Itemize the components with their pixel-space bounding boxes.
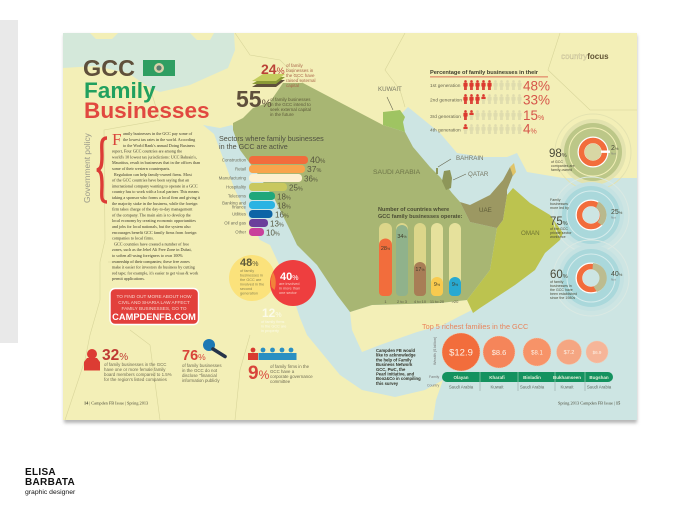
pictogram chart: generations: 4th generation (430, 128, 461, 134)
bar chart: sectors: 25% (289, 184, 303, 192)
stat: 24% raised capital: raised external (286, 78, 316, 83)
donut: 98% family-owned: family-owned (551, 168, 572, 172)
article text: Regulation can help family-owned firms. Most (114, 172, 193, 177)
article text: of the company. The main aim is to develop the (112, 212, 191, 217)
article text: to the World Bank's annual Doing Business (123, 143, 195, 148)
chart: richest families: Saudi Arabia (587, 384, 612, 390)
stat: 48% circle (229, 255, 275, 301)
donut: 60% established: the GCC have (550, 288, 573, 292)
credit text: Booz&Co in compiling (376, 376, 421, 381)
article text: encourages benefit GCC family firms from foreign (112, 230, 196, 235)
icon: red brace (97, 138, 107, 202)
stat: 12%: in property (261, 329, 279, 333)
map labels: SAUDI ARABIA (373, 169, 421, 176)
chart: richest families: Binladin (523, 375, 541, 380)
pictogram chart: generations: 1st generation (430, 83, 461, 89)
chart: richest families (427, 333, 613, 391)
pictogram chart: generations: 33% (523, 92, 550, 108)
icon: GCC flag (143, 60, 175, 76)
article text: local economy by creating economic opportunities (112, 218, 196, 223)
stat: 9%: corporate governance (270, 374, 313, 379)
stat: 76%: in the GCC do not (182, 368, 218, 373)
bar chart: sectors: 13% (270, 220, 284, 228)
chart: richest families: Kharafi (489, 375, 505, 380)
credit text (376, 348, 421, 386)
map background (63, 33, 637, 420)
donut: 60% established: Not (611, 278, 616, 282)
bar chart: sectors: Telecoms (228, 194, 246, 198)
article text: GCC countries have created a number of free (114, 241, 189, 246)
stat: 9%: GCC have a (270, 369, 295, 374)
title (83, 55, 210, 123)
stat: 40% circle: one sector (279, 291, 297, 295)
chart: richest families: $8.6 (492, 348, 506, 357)
pictogram chart: generations: 15% (523, 108, 544, 123)
stat: 48% circle: businesses in (240, 274, 263, 278)
stat: 24% raised capital: the GCC have (286, 73, 315, 78)
stat: 12%: 12% (262, 306, 282, 320)
stat: 9% (248, 363, 313, 384)
donut: 60% established: 40% (611, 271, 623, 278)
article text: report, Four GCC countries are among the (112, 149, 182, 155)
bar chart: sectors: 10% (266, 228, 280, 238)
chart: richest families: Kuwait (561, 384, 574, 390)
stat: 76%: information publicly (182, 378, 220, 383)
map labels: BAHRAIN (456, 155, 484, 162)
designer credit: ELISA (25, 467, 56, 478)
panel shadow (64, 35, 637, 423)
stat: 40% circle: are involved (279, 282, 299, 286)
donut: 75% private: businesses (550, 202, 568, 206)
icon: committee people (248, 348, 296, 360)
donut: 98% family-owned (549, 114, 631, 190)
bar chart: countries: 1 (384, 299, 387, 304)
bar chart: countries: >20 (452, 299, 459, 304)
map labels: UAE (479, 207, 492, 214)
stat: 24% raised capital (261, 61, 316, 88)
designer credit (25, 467, 76, 496)
article text: some of their western counterparts. (112, 166, 170, 171)
donut: 98% family-owned: Not (611, 152, 616, 156)
chart: richest families: Saudi Arabia (449, 384, 474, 390)
bar chart: countries: 28% (381, 246, 390, 252)
chart: richest families: $12.9 (449, 348, 473, 358)
map labels: OMAN (521, 230, 540, 237)
stat: 76%: disclose "financial (182, 373, 217, 378)
stat: 48% circle: generation (240, 292, 258, 296)
callout: campdenfb: FAMILY BUSINESSES, GO TO (121, 306, 187, 311)
title: GCC (83, 55, 135, 81)
callout: campdenfb: TO FIND OUT MORE ABOUT HOW (116, 294, 192, 299)
article text: to soften all-using foreigners to own 100% (112, 253, 183, 258)
stat: 48% circle: of family (240, 269, 254, 273)
credit text: like to acknowledge (376, 353, 416, 358)
article text: ownership of their companies; these free zones (112, 259, 190, 264)
donut: 75% private: more led by (550, 206, 569, 210)
heading: country focus: countryfocus (561, 52, 609, 61)
article text: the majority stake in the business, while the foreign (112, 201, 197, 207)
article text: amily businesses in the GCC pay some of (123, 131, 193, 136)
pictogram chart: generations: 3rd generation (430, 114, 461, 120)
bar chart: sectors: 40% (310, 155, 326, 165)
donut: 75% private: of the GCC (550, 227, 568, 231)
heading: sectors: in the GCC are active (219, 142, 288, 151)
credit text: GCC, PwC, the (376, 367, 406, 372)
stat: 76%: of family businesses (182, 363, 222, 368)
designer credit: graphic designer (25, 489, 76, 496)
chart: richest families: Kuwait (491, 384, 504, 390)
bar chart: sectors: finance (232, 204, 247, 210)
side strip (0, 20, 18, 343)
bar chart: sectors: 18% (277, 192, 291, 202)
stat: 24% raised capital: 24% (261, 61, 285, 77)
stat: 12%: in the GCC are (261, 324, 286, 328)
donut: 98% family-owned: 2% (611, 145, 619, 152)
pictogram chart: generations: 2nd generation (430, 98, 462, 104)
heading: countries (378, 207, 463, 220)
chart: richest families: $6.9 (593, 350, 602, 355)
bar chart: countries: 4 to 10 (414, 299, 427, 304)
stat: 32% female: of family businesses in the GCC (104, 362, 166, 367)
stat: 24% raised capital: businesses in (286, 68, 314, 73)
stat: 55% external capital: in the GCC intend to (270, 102, 311, 107)
article text (112, 131, 201, 281)
credit text: this survey (376, 381, 399, 386)
icon: stacked layers (252, 74, 285, 87)
stat: 48% circle: the GCC are (240, 278, 261, 282)
article text: red tape; for example, it's easier to get visas & work (112, 270, 199, 276)
stat: 9%: committee (270, 379, 291, 384)
donut: 75% private: Not (611, 216, 616, 220)
bar chart: sectors: 37% (307, 164, 321, 174)
stat: 32% female: have one or more female family (104, 367, 166, 372)
bar chart: sectors: Manufacturing (219, 176, 247, 180)
heading: richest families: Top 5 richest families in the GCC (422, 322, 528, 331)
map labels: QATAR (468, 171, 489, 178)
bar chart: sectors: 16% (275, 210, 289, 220)
bar chart: sectors: Other (235, 230, 247, 234)
footer right: Spring 2013 Campden FB Issue | 15 (558, 400, 620, 406)
stat: 55% external capital (236, 86, 311, 117)
donut: 75% private: Family (550, 198, 561, 202)
donut: 75% private: 25% (611, 209, 623, 216)
stat: 48% circle: involved in the (240, 282, 264, 286)
designer credit: BARBATA (25, 477, 75, 488)
article text: firm takes charge of the day-to-day management (112, 207, 193, 212)
article text: international company wanting to operate in a GCC (112, 183, 198, 188)
donut: 60% established: been established (550, 292, 577, 296)
article text: and jobs for local nationals, but the system also (112, 224, 191, 230)
callout: campdenfb: CIVIL AND SHARIA LAW AFFECT (118, 300, 190, 305)
donut: 75% private: 75% (550, 216, 568, 228)
credit text: the help of Family (376, 357, 412, 362)
heading: sectors (219, 134, 324, 151)
chart: richest families: Olayan (453, 375, 469, 380)
article text: of the GCC countries have been saying that an (112, 178, 189, 183)
bar chart: countries: 17% (415, 267, 425, 273)
icon: microphone (203, 339, 225, 356)
donut: 75% private (550, 177, 629, 253)
article text: make it easier for investors do business by cutting (112, 265, 195, 270)
chart: richest families: Country (427, 384, 440, 388)
pictogram chart: generations: 48% (523, 78, 550, 94)
bar chart: countries: 9% (434, 282, 440, 288)
map labels (373, 86, 540, 237)
bar chart: sectors: Banking and (222, 200, 247, 206)
stat: 55% external capital: in the future (270, 112, 294, 117)
donut: 60% established: 60% (550, 269, 568, 281)
donut: 60% established: of family (550, 280, 564, 284)
heading: sectors: Sectors where family businesses (219, 134, 324, 143)
donut: 75% private: workforce (550, 235, 566, 239)
stat: 32% female: for the region's listed companies (104, 377, 168, 382)
article text: country has to work with a local partner. This means (112, 189, 199, 194)
stat: 40% circle: 40% (280, 271, 298, 283)
stat: 48% circle: 48% (240, 257, 258, 269)
bar chart: sectors (219, 155, 326, 238)
heading: countries: Number of countries where (378, 207, 449, 213)
article drop cap: F (112, 130, 121, 149)
stat: 40% circle: in more than (279, 286, 300, 290)
stat: 48% circle: second (240, 287, 252, 291)
icon: woman (84, 349, 100, 370)
donut: 60% established: businesses in (550, 284, 572, 288)
article text: companies to local firms. (112, 236, 154, 241)
pictogram chart: generations: Percentage of family businesses in their (430, 70, 539, 76)
donut: 98% family-owned: companies are (551, 164, 575, 168)
stat: 55% external capital: of family businesses (270, 97, 311, 102)
stat: 32% female (102, 347, 172, 382)
stat: 76%: 76% (182, 348, 206, 364)
pictogram chart: generations (430, 70, 550, 136)
chart: richest families: Bukhamseen (553, 375, 581, 380)
stat: 55% external capital: seek external capital (270, 107, 311, 112)
bar chart: sectors: Utilities (232, 212, 246, 216)
chart: richest families: Wealth ($ billion) (433, 336, 437, 365)
title: Family (84, 78, 156, 103)
stat: 24% raised capital: of family (286, 63, 304, 68)
chart: richest families: $8.1 (531, 350, 543, 356)
heading: countries: GCC family businesses operate: (378, 214, 463, 220)
bar chart: sectors: 36% (304, 174, 318, 184)
bar chart: countries: 2 to 3 (397, 299, 408, 304)
donut: 98% family-owned: of GCC (551, 160, 563, 164)
stat: 12%: of family firms (261, 320, 285, 324)
donut: 75% private: private sector (550, 231, 572, 235)
donut: 60% established: since the 1980s (550, 296, 575, 300)
bar chart: countries: 9% (452, 282, 458, 288)
bar chart: sectors: Retail (235, 166, 246, 172)
credit text: Business Network (376, 362, 413, 367)
bar chart: countries (379, 223, 461, 304)
bar chart: sectors: Hospitality (226, 184, 247, 190)
map labels: KUWAIT (378, 86, 402, 93)
section label: government policy: Government policy (82, 132, 92, 203)
article text: permit applications. (112, 276, 145, 281)
stat: 24% raised capital: capital (286, 83, 299, 88)
footer left: 14 | Campden FB Issue | Spring 2013 (84, 400, 148, 406)
article text: zones, such as the Jebel Ali Free Zone in Dubai, (112, 247, 192, 253)
bar chart: sectors: 18% (277, 202, 291, 210)
donut: 98% family-owned: 98% (549, 148, 567, 160)
bar chart: countries: 34% (397, 234, 407, 240)
chart: richest families: Bugshan (589, 375, 609, 380)
bar chart: countries: 11 to 20 (430, 299, 445, 304)
callout: campdenfb (110, 288, 198, 324)
bar chart: sectors: Construction (222, 158, 247, 162)
stat: 12% (261, 306, 286, 333)
stat: 55% external capital: 55% (236, 86, 272, 112)
chart: richest families: Family (429, 375, 440, 379)
stat: 9%: of family firms in the (270, 364, 310, 369)
stat: 40% circle (270, 260, 316, 306)
credit text: Pearl Initiative, and (376, 372, 415, 376)
article text: world's 10 lowest tax jurisdictions: UCC Bahrain's, (112, 154, 197, 160)
article text: Mauritius, result in businesses that in the offices than (112, 160, 200, 166)
donut: 60% established (550, 240, 629, 316)
article text: taking a sponsor who forms a local firm and giving it (112, 195, 201, 200)
stat: 9%: 9% (248, 363, 270, 384)
credit text: Campden FB would (376, 348, 416, 353)
pictogram chart: generations: 4% (523, 122, 537, 136)
bar chart: sectors: Oil and gas (224, 220, 246, 226)
article text: the lowest tax rates in the world. According (123, 137, 195, 142)
stat: 32% female: 32% (102, 347, 128, 364)
callout: campdenfb: CAMPDENFB.COM (112, 312, 196, 322)
title: Businesses (84, 98, 210, 123)
stat: 32% female: board members compared to 1.5% (104, 372, 172, 377)
chart: richest families: Saudi Arabia (520, 384, 545, 390)
chart: richest families: $7.2 (564, 350, 574, 356)
stat: 76% (182, 348, 222, 383)
